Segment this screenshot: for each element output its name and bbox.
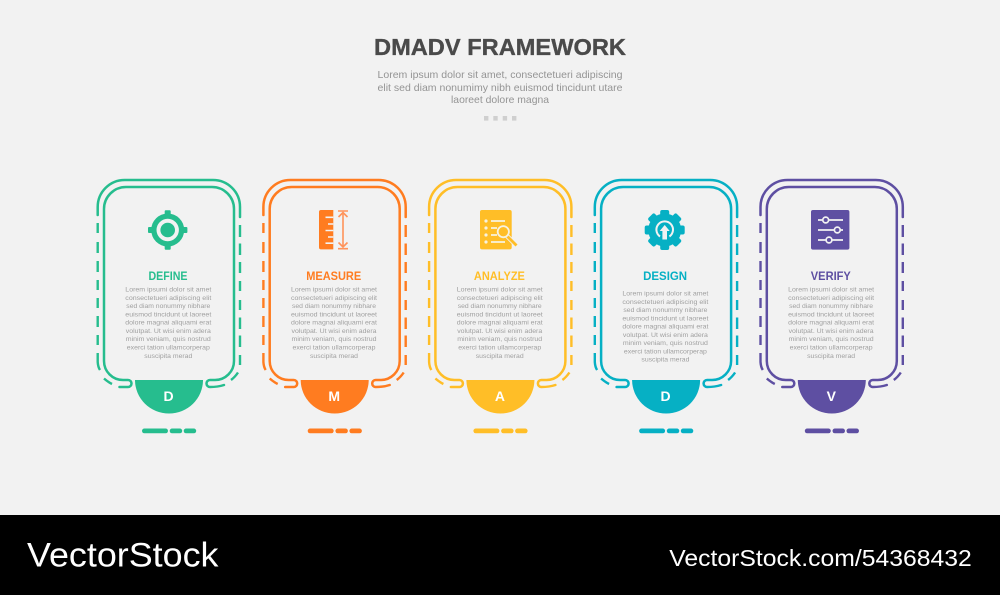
text block: design: suscipita merad xyxy=(641,357,690,364)
text block: verify xyxy=(788,287,874,360)
heading: define: DEFINE xyxy=(148,269,188,283)
badge: M xyxy=(301,380,369,414)
icon: ruler and arrow xyxy=(319,210,348,249)
text block: analyze: Lorem ipsumi dolor sit amet xyxy=(457,287,543,294)
heading: analyze: ANALYZE xyxy=(474,269,525,283)
badge: D xyxy=(135,380,203,414)
badge: A xyxy=(466,380,534,414)
text block: measure: Lorem ipsumi dolor sit amet xyxy=(291,287,377,294)
text block: verify: dolore magnai aliquami erat xyxy=(788,320,874,327)
text block: verify: euismod tincidunt ut laoreet xyxy=(788,311,874,318)
card outline xyxy=(263,180,406,387)
text block: measure: sed diam nonummy nibhare xyxy=(292,303,376,310)
progress bars xyxy=(308,428,362,433)
footer logo text: VectorStock xyxy=(27,537,219,575)
heading: verify: VERIFY xyxy=(811,269,851,283)
progress bars xyxy=(639,428,693,433)
text block: verify: minim veniam, quis nostrud xyxy=(789,336,874,343)
progress bars xyxy=(142,428,196,433)
panel: analyze xyxy=(429,180,571,433)
badge: D: D xyxy=(661,388,671,404)
subtitle text block xyxy=(378,70,623,106)
text block: design: dolore magnai aliquami erat xyxy=(622,324,709,331)
card outline xyxy=(429,180,571,387)
text block: design xyxy=(622,290,709,364)
text block: define: sed diam nonummy nibhare xyxy=(126,303,211,310)
text block: measure: volutpat. Ut wisi enim adera xyxy=(292,328,377,335)
footer image id: VectorStock.com/54368432 xyxy=(669,545,972,571)
text block: design: volutpat. Ut wisi enim adera xyxy=(623,332,708,339)
text block: define: suscipita merad xyxy=(144,353,193,360)
text block: measure: exerci tation ullamcorperap xyxy=(292,344,376,352)
title dots xyxy=(484,116,516,121)
badge: A: A xyxy=(495,388,505,404)
heading: design: DESIGN xyxy=(643,269,687,283)
text block: design: Lorem ipsumi dolor sit amet xyxy=(622,290,709,298)
text block: analyze: euismod tincidunt ut laoreet xyxy=(457,311,543,318)
text block: analyze: suscipita merad xyxy=(476,353,524,360)
text block: verify: sed diam nonummy nibhare xyxy=(789,303,873,310)
text block: design: euismod tincidunt ut laoreet xyxy=(622,315,709,322)
text block: analyze: dolore magnai aliquami erat xyxy=(457,320,543,327)
text block: measure: euismod tincidunt ut laoreet xyxy=(291,311,377,318)
progress bars xyxy=(473,428,528,433)
badge: D: D xyxy=(163,388,174,404)
subtitle text block: elit sed diam nonumimy nibh euismod tincidunt utare xyxy=(378,83,623,94)
icon: document with magnifier xyxy=(480,210,516,249)
panel: measure xyxy=(263,180,406,433)
card outline xyxy=(760,180,903,387)
text block: measure xyxy=(291,287,377,360)
text block: verify: consectetueri adipiscing elit xyxy=(788,295,874,302)
text block: define: volutpat. Ut wisi enim adera xyxy=(126,328,211,335)
text block: measure: suscipita merad xyxy=(310,353,358,360)
progress bars xyxy=(805,428,859,433)
text block: define: Lorem ipsumi dolor sit amet xyxy=(125,287,211,294)
footer bar xyxy=(0,515,1000,595)
text block: define: euismod tincidunt ut laoreet xyxy=(125,311,211,318)
heading: measure: MEASURE xyxy=(306,269,361,283)
text block: define: minim veniam, quis nostrud xyxy=(126,336,211,343)
text block: verify: Lorem ipsumi dolor sit amet xyxy=(788,287,874,294)
icon: gear with up arrow xyxy=(645,210,685,250)
text block: measure: consectetueri adipiscing elit xyxy=(291,295,377,302)
icon: sliders xyxy=(811,210,849,250)
card outline xyxy=(98,180,240,387)
text block: verify: exerci tation ullamcorperap xyxy=(790,344,873,352)
text block: measure: dolore magnai aliquami erat xyxy=(291,320,377,327)
text block: define: dolore magnai aliquami erat xyxy=(125,320,211,327)
icon: target xyxy=(148,210,187,250)
text block: analyze xyxy=(457,287,543,360)
text block: design: minim veniam, quis nostrud xyxy=(623,340,708,347)
badge: V: V xyxy=(827,388,837,404)
card outline xyxy=(595,180,737,387)
text block: design: sed diam nonummy nibhare xyxy=(623,307,708,314)
badge: D xyxy=(632,380,700,414)
text block: analyze: minim veniam, quis nostrud xyxy=(457,336,543,343)
text block: analyze: sed diam nonummy nibhare xyxy=(458,303,542,310)
title: DMADV FRAMEWORK xyxy=(374,34,626,60)
text block: define: consectetueri adipiscing elit xyxy=(125,295,211,302)
badge: V xyxy=(798,380,866,414)
subtitle text block: laoreet dolore magna xyxy=(451,95,549,106)
text block: define xyxy=(125,287,211,360)
text block: define: exerci tation ullamcorperap xyxy=(127,344,210,352)
text block: analyze: consectetueri adipiscing elit xyxy=(457,295,543,302)
panel: verify xyxy=(760,180,903,433)
text block: verify: suscipita merad xyxy=(807,353,855,360)
text block: analyze: volutpat. Ut wisi enim adera xyxy=(457,328,543,335)
text block: design: consectetueri adipiscing elit xyxy=(622,299,709,306)
subtitle text block: Lorem ipsum dolor sit amet, consectetueri adipiscing xyxy=(378,70,623,81)
panel: design xyxy=(595,180,737,433)
panel: define xyxy=(98,180,240,433)
badge: M: M xyxy=(328,388,340,404)
text block: verify: volutpat. Ut wisi enim adera xyxy=(789,328,874,335)
text block: design: exerci tation ullamcorperap xyxy=(624,348,707,355)
text block: analyze: exerci tation ullamcorperap xyxy=(458,344,542,352)
text block: measure: minim veniam, quis nostrud xyxy=(292,336,377,343)
